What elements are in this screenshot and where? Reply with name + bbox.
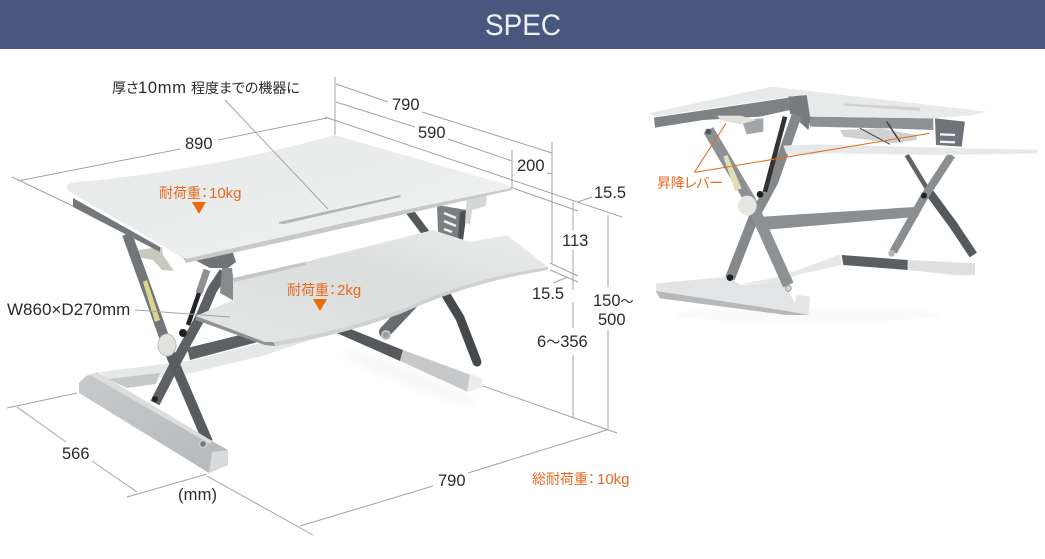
- front foot: [79, 372, 228, 473]
- top bracket: [193, 250, 236, 302]
- dimension numbers: 790: [438, 472, 466, 490]
- product: desk converter, front view: [67, 135, 548, 473]
- label: top load: 耐荷重：: [159, 185, 208, 201]
- label: device slot: 10mm: [138, 79, 186, 97]
- label: total load: 10kg: [597, 471, 630, 488]
- front scissor legs: [705, 115, 797, 291]
- base: [656, 254, 975, 315]
- warning sticker: [143, 280, 160, 322]
- front scissor legs: [127, 234, 224, 442]
- title: SPEC: [485, 9, 561, 42]
- right base rail: [332, 322, 483, 392]
- underside: [654, 95, 965, 147]
- label: tray load: 2kg: [337, 282, 361, 299]
- label: total load: 総耐荷重：: [532, 471, 595, 487]
- dimension numbers: 500: [598, 311, 626, 329]
- dimension numbers: 15.5: [594, 184, 626, 202]
- crossbar: [763, 207, 920, 230]
- lever handle: [137, 247, 174, 271]
- dimension lines: [7, 77, 622, 535]
- leader lines: [694, 123, 929, 172]
- label: tray load: 耐荷重：: [287, 282, 336, 298]
- label: device slot: 程度までの機器に: [191, 80, 300, 96]
- dimension numbers: 790: [392, 96, 420, 114]
- right bracket: [437, 193, 487, 240]
- keyboard tray: [196, 230, 548, 346]
- desk top: [648, 87, 987, 118]
- header band: [0, 0, 1045, 49]
- lever handle: [717, 116, 757, 124]
- dimension numbers: (mm): [178, 486, 217, 504]
- back rail of base: [100, 320, 340, 388]
- arrow: tray load: [313, 299, 327, 311]
- tray: [783, 144, 1038, 155]
- label: tray size: W860×D270mm: [7, 300, 130, 319]
- device slot: [279, 195, 401, 224]
- dimension numbers: 150～: [593, 292, 634, 310]
- knob: [158, 334, 176, 356]
- dimension numbers: 566: [62, 445, 90, 463]
- warning sticker: [723, 155, 742, 191]
- rear legs: [382, 212, 477, 362]
- dimension numbers: [62, 96, 634, 504]
- dimension numbers: 590: [418, 124, 446, 142]
- label: lever: 昇降レバー: [657, 175, 723, 191]
- dimension numbers: 15.5: [532, 285, 564, 303]
- desk top: [67, 135, 512, 263]
- dimension numbers: 890: [185, 135, 213, 153]
- arrow: top load: [192, 202, 206, 214]
- dimension numbers: 113: [562, 232, 588, 250]
- dimension numbers: 200: [517, 157, 545, 175]
- label: top load: 10kg: [209, 185, 242, 202]
- dimension numbers: 6～356: [537, 333, 588, 351]
- knob: [738, 196, 757, 216]
- cross bar: [187, 333, 258, 360]
- label: device slot: 厚さ: [112, 80, 138, 96]
- leader lines: [135, 100, 328, 317]
- rear legs: [888, 155, 973, 257]
- product: desk converter, side view: [648, 87, 1038, 322]
